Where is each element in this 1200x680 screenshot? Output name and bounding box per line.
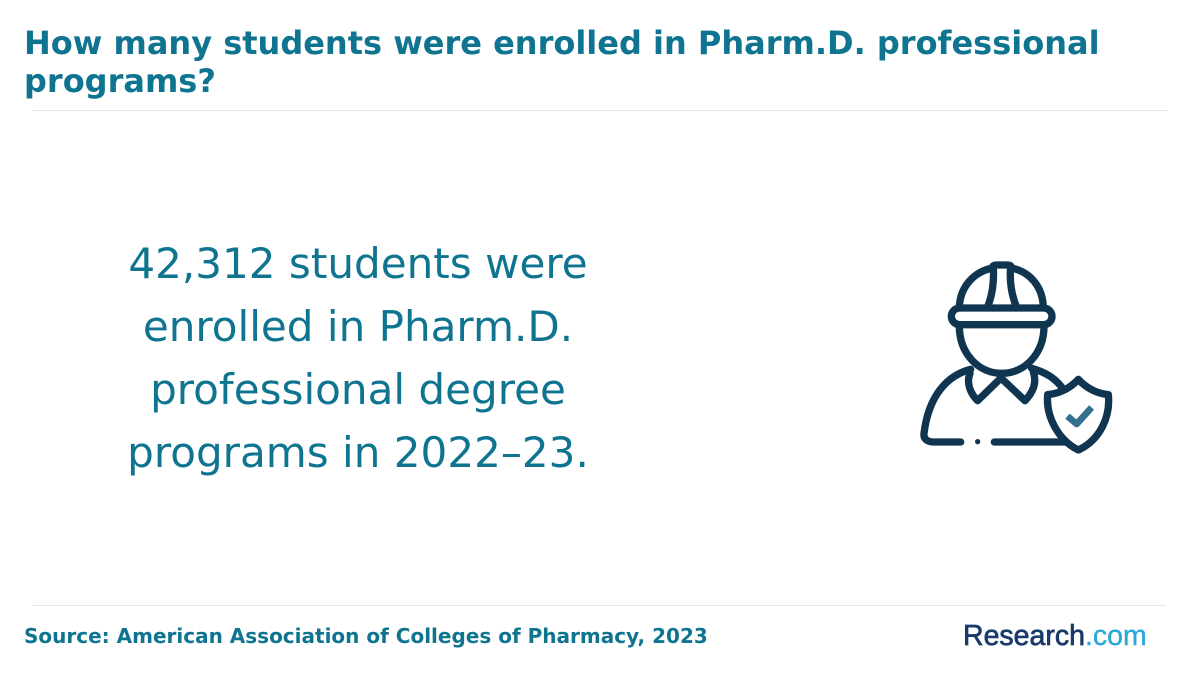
- title: How many students were enrolled in Pharm.D. professional programs?: [24, 24, 1100, 100]
- icon: worker with hard hat and shield: [920, 261, 1112, 454]
- main statement: 42,312 students were: [128, 239, 588, 288]
- main statement: enrolled in Pharm.D.: [143, 302, 573, 351]
- main statement: professional degree: [150, 365, 566, 414]
- logo: Research.com: Research.com: [963, 620, 1147, 652]
- main statement: programs in 2022–23.: [127, 428, 589, 477]
- main statement: [127, 239, 589, 477]
- source note: Source: American Association of Colleges of Pharmacy, 2023: [24, 624, 708, 648]
